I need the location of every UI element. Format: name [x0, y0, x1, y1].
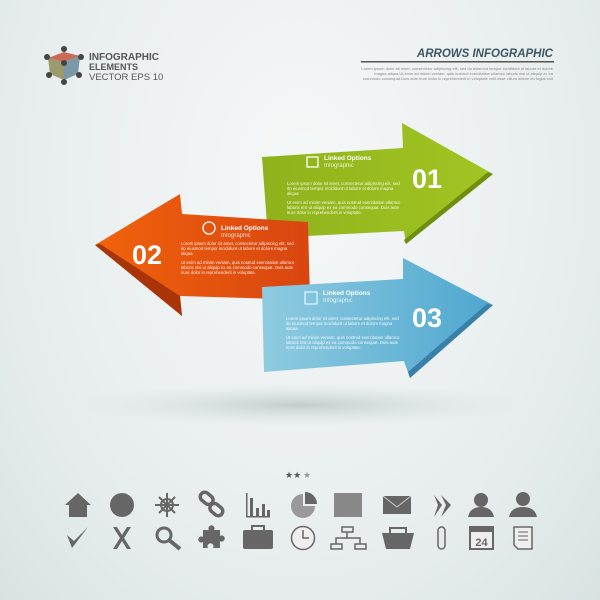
- arrow 03 blue: Ut enim ad minim veniam, quis nostrud exercitation ullamco: [286, 335, 400, 340]
- arrow 02 orange: aliqua.: [181, 251, 194, 256]
- stars: ★★: [285, 470, 301, 480]
- arrow 01 green: do eiusmod tempor incididunt ut labore et dolore magna: [287, 186, 394, 191]
- arrow 01 green: irure dolor in reprehenderit in voluptate.: [287, 210, 362, 215]
- arrow 01 green: [262, 123, 493, 244]
- icons row 2: [67, 525, 532, 550]
- stars: [285, 470, 311, 480]
- arrow 03 blue: aliqua.: [286, 326, 299, 331]
- arrow 01 green: aliqua.: [287, 191, 300, 196]
- arrow 02 orange: Lorem ipsum dolor sit amet, consectetur adipiscing elit, sed: [181, 241, 294, 246]
- arrow 02 orange: laboris nisi ut aliquip ex ea commodo consequat. Duis aute: [181, 265, 294, 270]
- arrow 02 orange: 02: [132, 240, 162, 270]
- title: Lorem ipsum dolor sit amet, consectetur adipiscing elit, sed do eiusmod tempor incididunt ut labore et dolore: [361, 66, 554, 71]
- arrow 01 green: 01: [412, 164, 442, 194]
- icons row 1: [65, 490, 537, 518]
- arrow 01 green: laboris nisi ut aliquip ex ea commodo consequat. Duis aute: [287, 205, 400, 210]
- title: magna aliqua.Ut enim ad minim veniam, quis nostrud exercitation ullamco laboris nisi ut aliquip ex ea: [374, 71, 554, 76]
- arrow 02 orange: Ut enim ad minim veniam, quis nostrud exercitation ullamco: [181, 260, 295, 265]
- logo text: ELEMENTS: [89, 62, 138, 72]
- arrow 01 green: Lorem ipsum dolor sit amet, consectetur adipiscing elit, sed: [287, 181, 400, 186]
- shadow: [70, 383, 530, 427]
- arrow 02 orange: irure dolor in reprehenderit in voluptate.: [181, 270, 256, 275]
- arrow 02 orange: Linked Options: [221, 225, 269, 232]
- arrow 01 green: Ut enim ad minim veniam, quis nostrud exercitation ullamco: [287, 200, 401, 205]
- title: ARROWS INFOGRAPHIC: [416, 48, 554, 60]
- arrow 02 orange: Infographic: [221, 233, 251, 239]
- arrow 03 blue: Infographic: [323, 298, 353, 304]
- logo text: [89, 52, 163, 83]
- arrow 02 orange: [95, 194, 310, 316]
- arrow 03 blue: [262, 258, 493, 378]
- logo text: VECTOR EPS 10: [89, 72, 163, 83]
- title: commodo consequat.Duis aute irure dolor in reprehenderit in voluptate velit esse cillum dolore eu fugiat null: [363, 76, 553, 81]
- arrow 01 green: Linked Options: [324, 155, 372, 162]
- logo text: INFOGRAPHIC: [89, 52, 159, 63]
- arrow 02 orange: do eiusmod tempor incididunt ut labore et dolore magna: [181, 246, 288, 251]
- arrow 03 blue: irure dolor in reprehenderit in voluptate.: [286, 345, 361, 350]
- arrow 03 blue: do eiusmod tempor incididunt ut labore et dolore magna: [286, 321, 393, 326]
- arrow 03 blue: Lorem ipsum dolor sit amet, consectetur adipiscing elit, sed: [286, 316, 399, 321]
- arrow 03 blue: laboris nisi ut aliquip ex ea commodo consequat. Duis aute: [286, 340, 399, 345]
- title: [361, 48, 554, 81]
- logo: [44, 46, 84, 85]
- icons row 2: 24: [475, 537, 488, 549]
- arrow 03 blue: 03: [412, 303, 442, 333]
- stars: ★: [303, 470, 311, 480]
- arrow 01 green: Infographic: [324, 163, 354, 169]
- arrow 03 blue: Linked Options: [323, 290, 371, 297]
